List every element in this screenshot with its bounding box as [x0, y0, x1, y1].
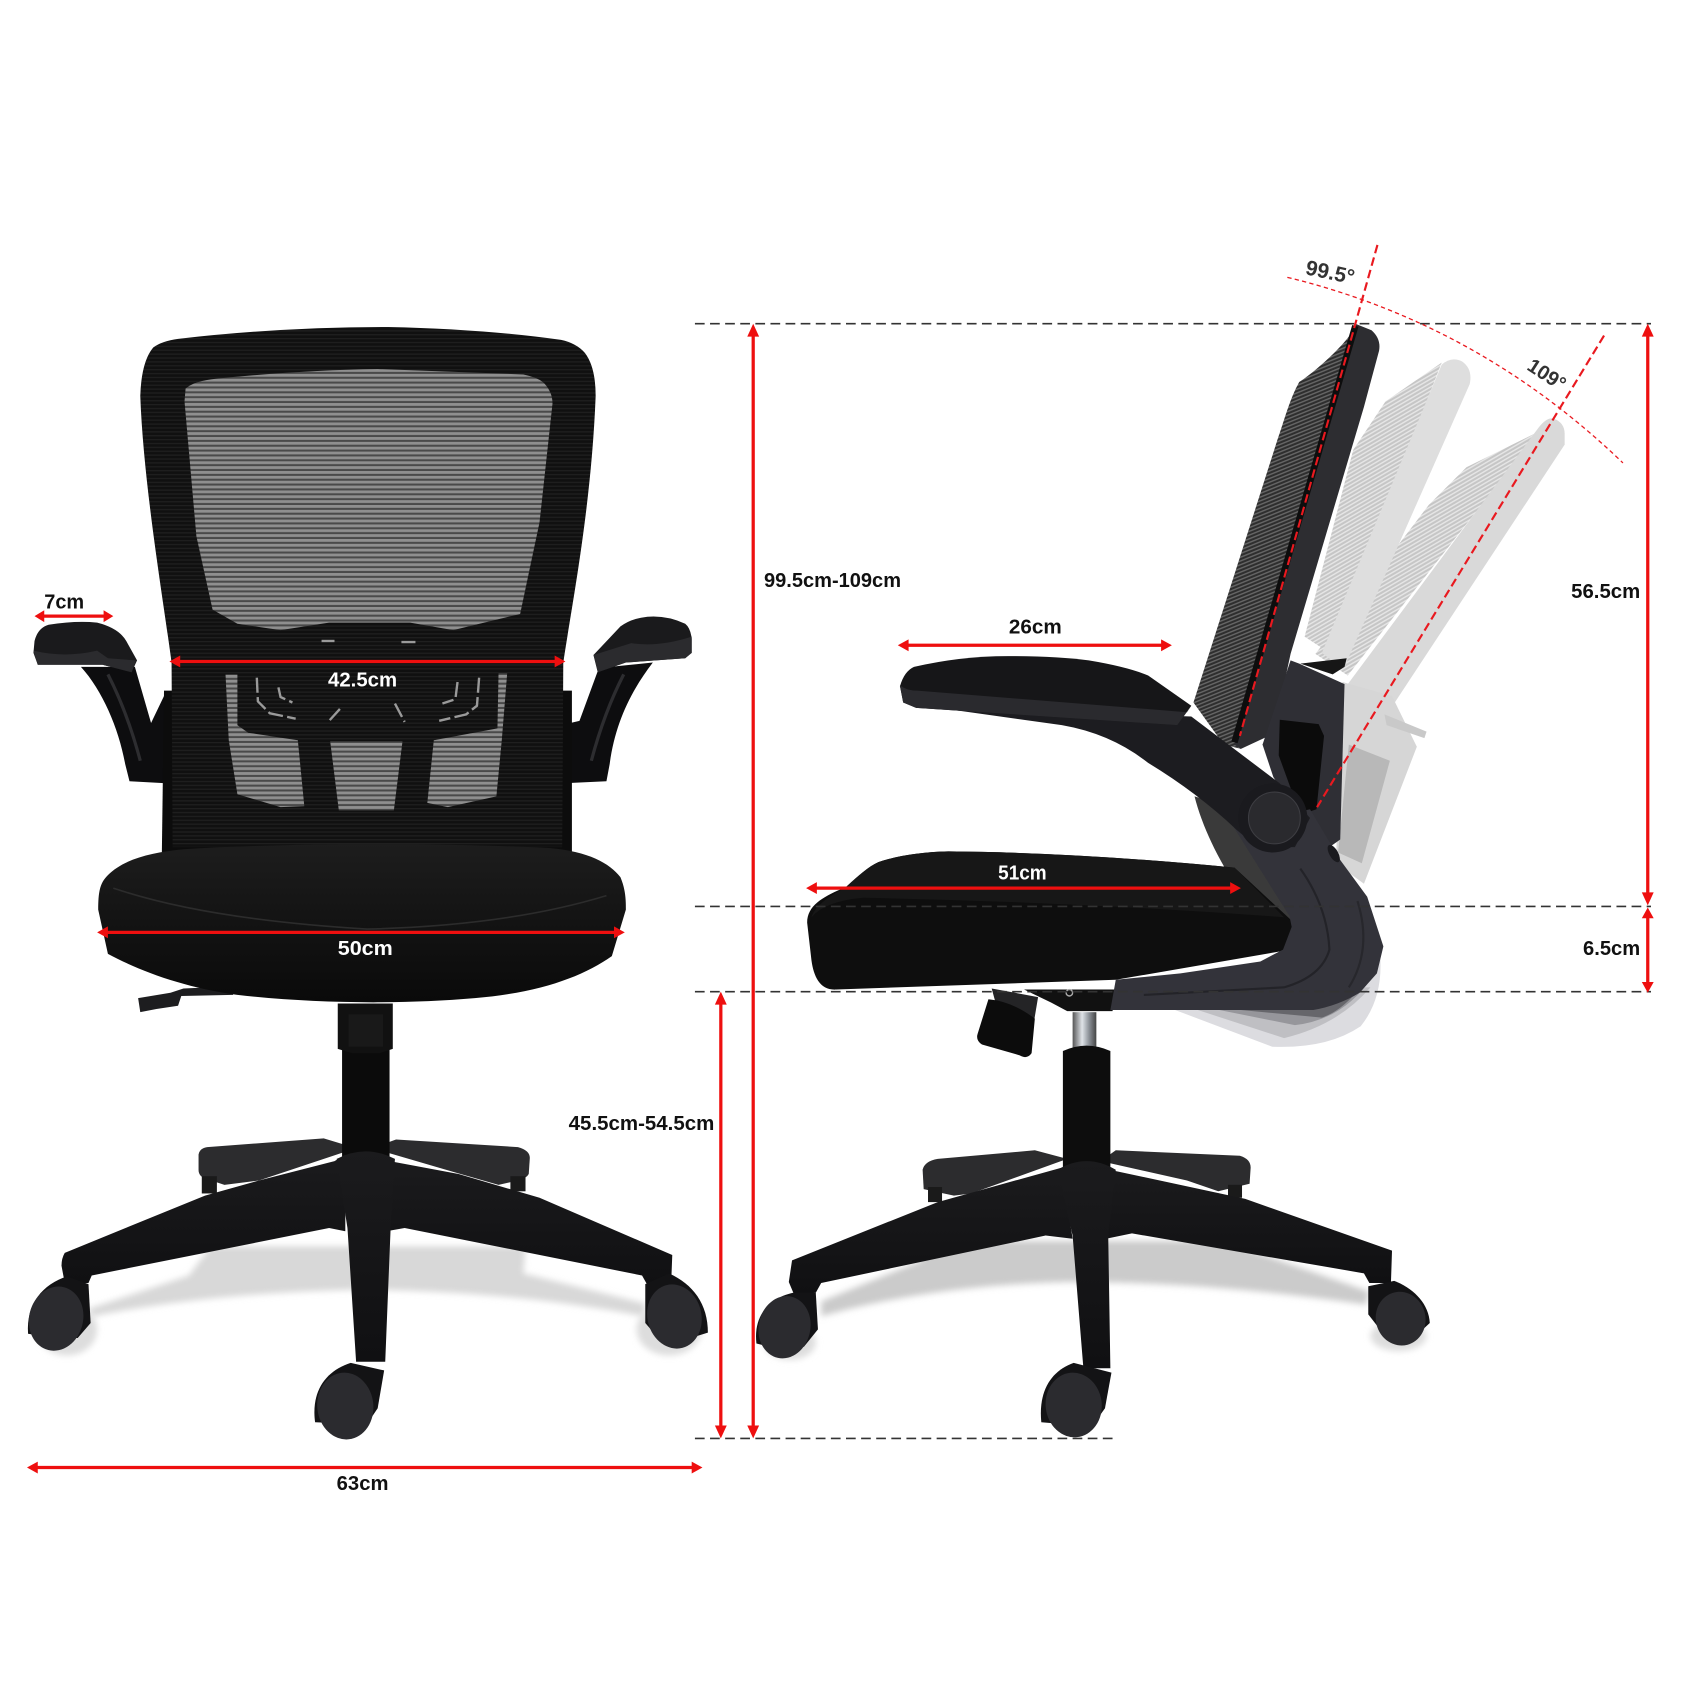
- arrow: seat depth 51cm: [806, 882, 1241, 894]
- label: 99.5cm-109cm: 99.5cm-109cm: [764, 570, 901, 592]
- arrow: seat height: [715, 992, 727, 1438]
- five-star base: front chair: [62, 1151, 672, 1362]
- floor shadow: side chair: [764, 1241, 1427, 1360]
- arrow: total height: [747, 324, 759, 1438]
- dimension labels: [44, 256, 1640, 1495]
- backrest mesh: side: [1193, 327, 1355, 749]
- caster: front center: [314, 1363, 384, 1442]
- lumbar mesh panels: [226, 673, 507, 810]
- reference dashed lines: [695, 324, 1651, 1438]
- caster: front left: [22, 1277, 91, 1357]
- label: 51cm: 51cm: [998, 862, 1047, 884]
- ghost backrest: intermediate: [1305, 359, 1470, 669]
- label: 63cm: 63cm: [337, 1473, 388, 1495]
- label: 99.5 degrees: 99.5°: [1304, 256, 1357, 289]
- armrest: right: [561, 616, 692, 783]
- caster: front right: [640, 1273, 708, 1354]
- label: 42.5cm: 42.5cm: [328, 669, 397, 691]
- arrow: back height 56.5cm: [1642, 324, 1654, 905]
- backrest frame: front chair: [140, 327, 596, 852]
- back button: [1325, 843, 1342, 864]
- label: 109 degrees: 109°: [1523, 355, 1570, 396]
- label: 26cm: 26cm: [1009, 616, 1062, 638]
- armrest pivot knob: [1238, 783, 1307, 852]
- rear base pads: front chair: [199, 1138, 530, 1193]
- label: 45.5cm-54.5cm: 45.5cm-54.5cm: [569, 1113, 714, 1135]
- arrow: 6.5cm: [1642, 908, 1654, 993]
- dimension arrows: [27, 324, 1654, 1473]
- upper mesh panel: [185, 369, 552, 630]
- arrow: armrest length 26cm: [898, 639, 1172, 651]
- gas column: front chair: [338, 1004, 393, 1157]
- seat cushion: side: [807, 851, 1294, 990]
- caster: side center: [1041, 1363, 1111, 1440]
- seat mechanism plate: [1024, 990, 1116, 1011]
- rear base pads: side chair: [923, 1150, 1251, 1202]
- ghost seat positions: [1175, 955, 1381, 1047]
- floor shadow: front chair: [37, 1246, 701, 1355]
- height lever: front chair: [138, 986, 233, 1012]
- front chair view: [22, 327, 708, 1442]
- gas column: side chair: [1063, 1012, 1110, 1168]
- label: 50cm: 50cm: [338, 938, 393, 960]
- seat bracket: [1110, 809, 1383, 1010]
- lower mesh: side: [1195, 796, 1295, 928]
- recline angle guides: [1240, 245, 1623, 807]
- seat tilt knob: [977, 988, 1038, 1057]
- ghost backrest: 109 degrees: [1315, 418, 1565, 884]
- label: 7cm: 7cm: [44, 592, 84, 614]
- armrest: left: [33, 622, 168, 783]
- arrow: backrest width 42.5cm: [169, 656, 565, 667]
- armrest: side: [900, 656, 1310, 847]
- backrest mount: [1263, 658, 1347, 852]
- arrow: base width 63cm: [27, 1462, 702, 1473]
- seat cushion: front chair: [98, 844, 626, 1002]
- backrest frame: side: [1234, 324, 1379, 749]
- arrow: armrest width 7cm: [35, 610, 113, 622]
- side chair view: [753, 324, 1565, 1440]
- five-star base: side chair: [789, 1161, 1392, 1368]
- label: 56.5cm: 56.5cm: [1571, 581, 1640, 603]
- lumbar support lines: [257, 641, 479, 722]
- label: 6.5cm: 6.5cm: [1583, 938, 1640, 960]
- caster: side right: [1368, 1281, 1431, 1351]
- caster: side left: [753, 1291, 818, 1363]
- arrow: seat width 50cm: [97, 926, 625, 938]
